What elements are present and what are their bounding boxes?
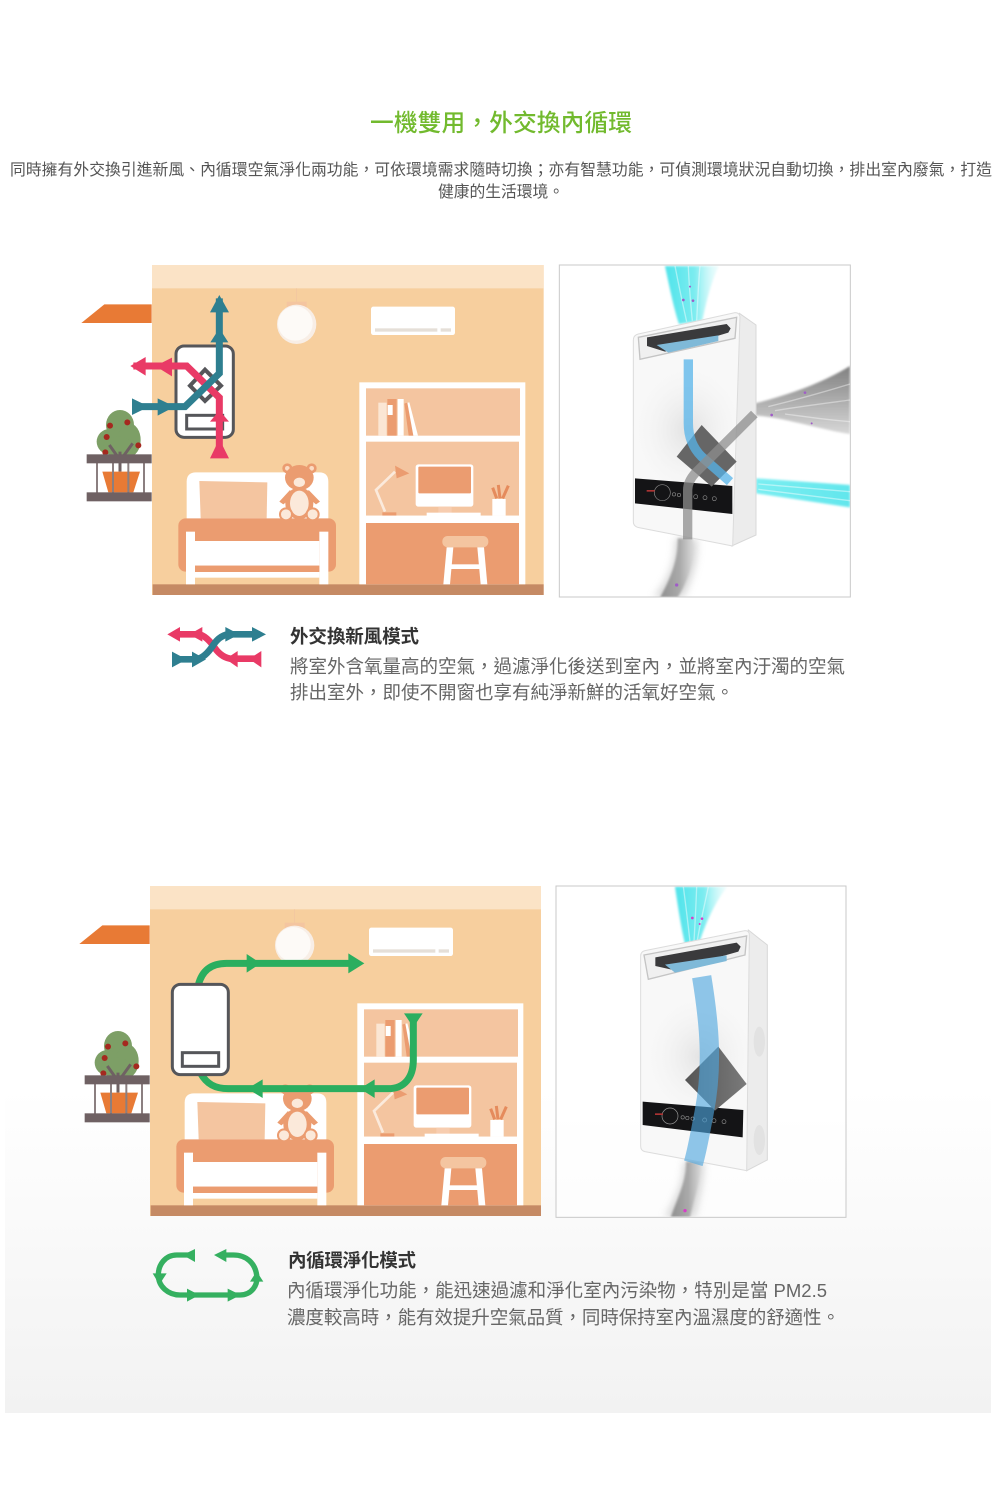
intro paragraph: 健康的生活環境。 — [438, 182, 564, 201]
panel: product photo outdoor air exchange — [559, 265, 850, 597]
bookshelf and desk — [357, 1003, 523, 1205]
cyan stream top — [665, 266, 719, 324]
air conditioner — [369, 928, 453, 956]
internal air path grey — [688, 414, 754, 539]
ventilator unit outline — [176, 346, 233, 437]
bookshelf and desk — [359, 382, 525, 584]
frame — [556, 886, 846, 1217]
bed — [176, 1093, 334, 1205]
bed — [178, 472, 336, 584]
arrow: green supply path — [198, 953, 364, 985]
awning — [79, 925, 150, 944]
mode 2 description: 內循環淨化功能，能迅速過濾和淨化室內污染物，特別是當 PM2.5 — [287, 1280, 827, 1301]
mode 2 description: 濃度較高時，能有效提升空氣品質，同時保持室內溫濕度的舒適性。 — [287, 1307, 840, 1328]
legend icon: exchange arrows — [167, 627, 266, 667]
ventilator unit outline — [172, 984, 228, 1075]
grey stream bottom — [653, 538, 697, 597]
arrow: green return path — [201, 1013, 423, 1098]
mode 1 heading: 外交換新風模式 — [290, 626, 419, 647]
balcony plant — [87, 410, 152, 501]
air conditioner — [371, 307, 455, 335]
panel: product photo internal circulation — [556, 886, 846, 1217]
mode 1 description — [290, 656, 845, 703]
section background fade — [5, 1090, 991, 1413]
panel: outdoor air exchange room illustration — [81, 265, 544, 595]
arrows and unit: internal circulation — [172, 953, 423, 1098]
ceiling lamp — [277, 288, 316, 344]
teddy bear — [277, 1084, 318, 1141]
product body — [632, 313, 756, 546]
mode 1 description: 排出室外，即使不開窗也享有純淨新鮮的活氧好空氣。 — [290, 682, 734, 703]
teddy bear — [279, 463, 320, 520]
mode 2 description — [287, 1280, 840, 1328]
legend icon: circulation arrows — [153, 1249, 263, 1302]
particles — [683, 917, 703, 1212]
panel: internal circulation room illustration — [79, 886, 541, 1216]
room walls and floor — [152, 265, 544, 595]
internal air path blue — [688, 359, 730, 482]
ceiling lamp — [275, 909, 314, 965]
particles — [675, 286, 813, 587]
cyan stream top — [675, 887, 727, 944]
intro paragraph: 同時擁有外交換引進新風、內循環空氣淨化兩功能，可依環境需求隨時切換；亦有智慧功能，可偵測環境狀況自動切換，排出室內廢氣，打造 — [10, 160, 992, 179]
balcony plant — [85, 1031, 150, 1122]
mode 2 heading: 內循環淨化模式 — [288, 1250, 416, 1271]
internal heat exchanger diamond — [685, 1047, 747, 1111]
cyan stream right — [756, 478, 850, 507]
intro paragraph — [10, 160, 992, 201]
internal air path blue — [693, 977, 709, 1163]
arrow: pink exhaust air up and out — [130, 357, 229, 458]
arrow: teal fresh air in and up — [132, 295, 229, 416]
grey stream bottom — [665, 1162, 704, 1217]
room walls and floor — [150, 886, 541, 1216]
awning — [81, 304, 152, 323]
grey stream right — [755, 366, 850, 434]
frame — [559, 265, 850, 597]
title: 一機雙用，外交換內循環 — [370, 110, 632, 137]
mode 1 description: 將室外含氧量高的空氣，過濾淨化後送到室內，並將室內汙濁的空氣 — [290, 656, 845, 677]
product body — [641, 930, 767, 1171]
internal heat exchanger diamond — [677, 425, 737, 487]
